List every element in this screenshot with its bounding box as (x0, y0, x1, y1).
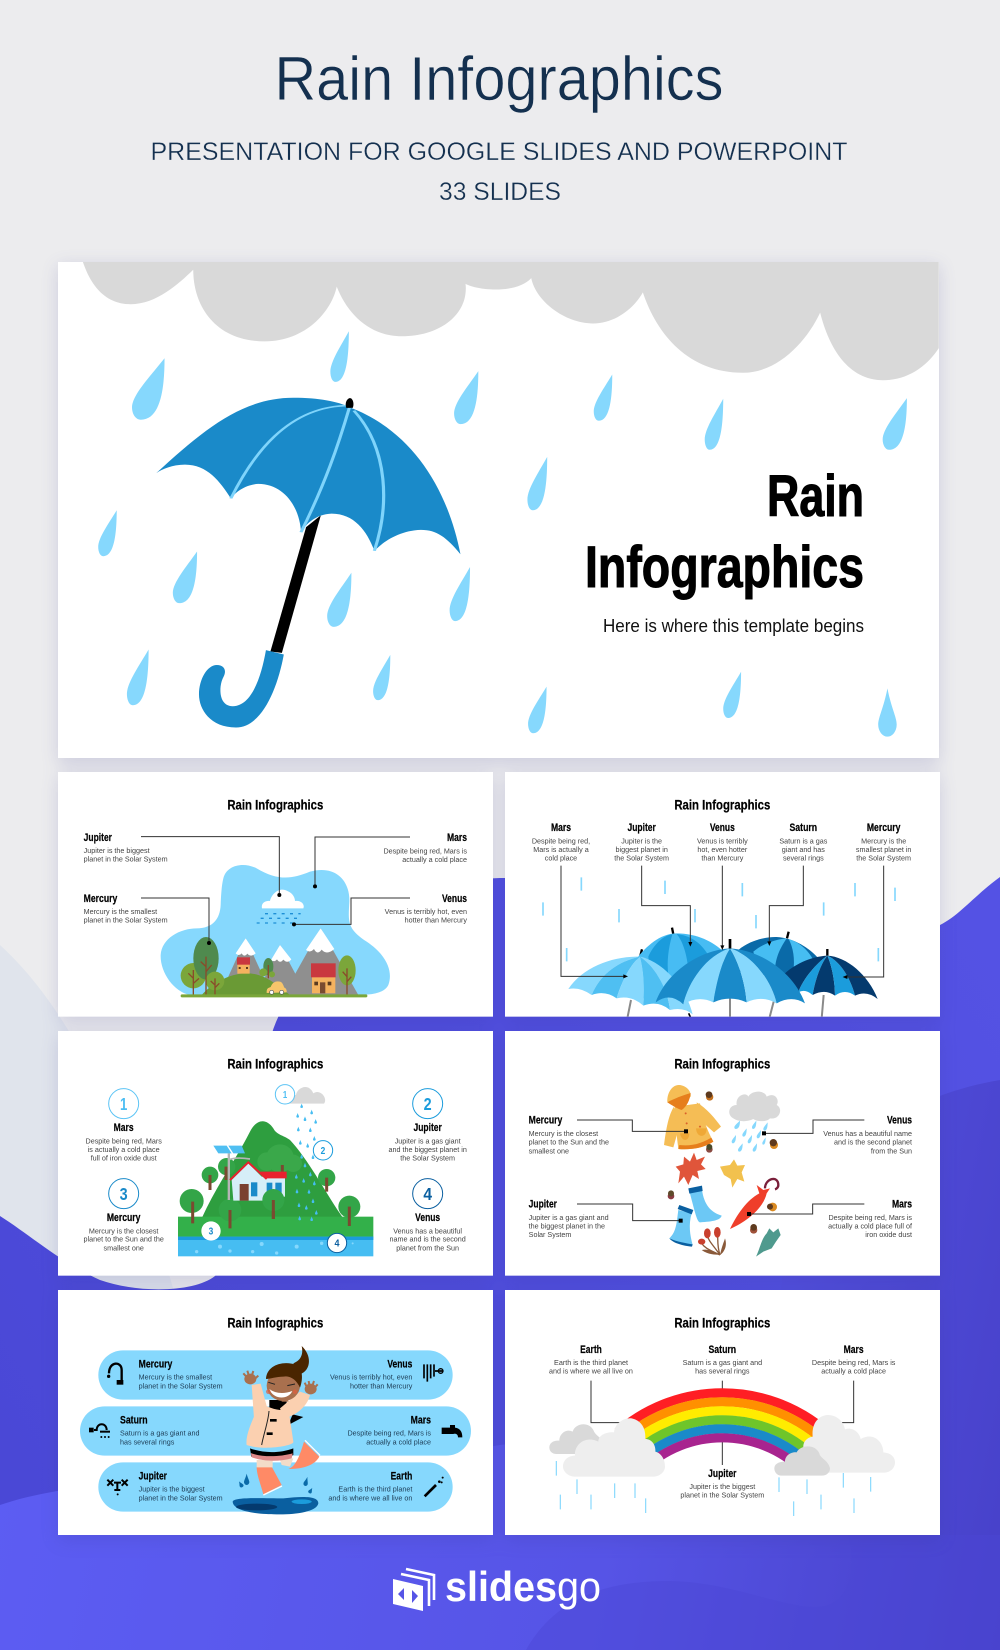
text: Earth: Earth (391, 1471, 413, 1483)
panel: rainbow slide (505, 1290, 940, 1535)
text: Venus: hotter than Mercury (405, 916, 467, 925)
text: Mars: Despite being red, Mars is (828, 1213, 912, 1222)
text: Mars: Despite being red, Mars is (347, 1429, 431, 1438)
text: Mercury: Mercury (867, 822, 901, 834)
umbrella group (568, 928, 878, 1018)
text: Saturn: giant and has (782, 845, 825, 854)
text: Saturn (683, 1344, 762, 1376)
cloud: right (803, 1415, 895, 1473)
rain streaks (543, 877, 895, 961)
text: Venus: Venus (442, 893, 467, 905)
text: Mars: Despite being red, Mars is (812, 1358, 896, 1367)
text: Jupiter: Jupiter (413, 1122, 442, 1134)
text: Venus (330, 1359, 413, 1390)
connector dots (207, 884, 317, 945)
icon: shower (89, 1424, 110, 1438)
text: Venus: than Mercury (701, 854, 744, 863)
text: Venus: Venus has a beautiful (393, 1226, 462, 1235)
text: Saturn: Saturn (708, 1344, 736, 1356)
main title: Rain Infographics (274, 45, 724, 114)
text: Mars (812, 1344, 896, 1376)
heading: Rain Infographics (674, 1314, 771, 1330)
marker 3 (201, 1221, 221, 1241)
icon: red leaf (676, 1153, 706, 1185)
text: Venus: Venus is terribly (697, 836, 748, 845)
text: Mars: Despite being red, Mars is (383, 846, 467, 855)
connector lines (591, 1381, 854, 1465)
text: Mars: Mars (892, 1199, 912, 1211)
text: Venus: and is the second planet (834, 1138, 912, 1147)
panel: hero slide (58, 262, 939, 758)
icon: boots (669, 1186, 722, 1247)
text: Mars (347, 1415, 431, 1446)
marker 2: 2 (321, 1146, 326, 1157)
marker 1: 1 (283, 1090, 288, 1101)
text: Saturn: several rings (783, 854, 824, 863)
text: Saturn (779, 822, 828, 863)
marker 4: 4 (334, 1239, 340, 1250)
marker 2 (313, 1141, 333, 1160)
text: Jupiter: planet in the Solar System (84, 855, 168, 864)
text: Mars (383, 832, 467, 864)
text: Jupiter: Jupiter is a gas giant (395, 1136, 461, 1145)
blue pills (80, 1350, 471, 1512)
heading: Rain Infographics (227, 1314, 324, 1330)
text: Venus: Venus is terribly hot, even (330, 1373, 412, 1382)
text: Jupiter: Jupiter is a gas giant and (529, 1213, 609, 1222)
text: Jupiter: Jupiter (84, 832, 113, 844)
text: Mars: Mars (114, 1122, 134, 1134)
text: Mars: Mars (411, 1415, 431, 1427)
text: Saturn: Saturn is a gas (779, 836, 828, 845)
text: Venus (389, 1212, 466, 1252)
text: Saturn (120, 1415, 200, 1446)
text: Venus: hot, even hotter (697, 845, 748, 854)
text: Mercury: planet to the Sun and the (84, 1235, 164, 1244)
text: Jupiter (139, 1471, 223, 1502)
icon: yellow leaf (720, 1159, 745, 1188)
text: Mars: Mars (447, 832, 467, 844)
text: Mercury (856, 822, 911, 863)
text: Jupiter: biggest planet in (615, 845, 668, 854)
text: Mars: Mars is actually a (533, 845, 589, 854)
text: Jupiter: the Solar System (400, 1153, 455, 1162)
icon: hose (424, 1364, 443, 1382)
text: Jupiter: Jupiter (139, 1471, 168, 1483)
text: Mercury: Mercury is the closest (89, 1226, 158, 1235)
text: Earth: Earth (580, 1344, 602, 1356)
cloud: front right (774, 1446, 830, 1476)
text: Venus: Venus has a beautiful name (823, 1129, 912, 1138)
badge 4 (413, 1179, 443, 1209)
badge 2: 2 (424, 1094, 432, 1114)
text: Mars: full of iron oxide dust (91, 1153, 157, 1162)
rain streaks (556, 1461, 871, 1516)
text: Saturn: has several rings (120, 1437, 175, 1446)
text: Mercury (84, 1212, 164, 1252)
subtitle: PRESENTATION FOR GOOGLE SLIDES AND POWERPOINT (150, 138, 848, 166)
text: Jupiter: the biggest planet in the (529, 1222, 605, 1231)
hero title: Infographics (585, 535, 864, 600)
text: Mars: Mars (844, 1344, 864, 1356)
text: Mars: iron oxide dust (865, 1230, 912, 1239)
text: Venus: Venus (387, 1359, 412, 1371)
heading: Rain Infographics (674, 1055, 771, 1071)
marker 4 (327, 1233, 347, 1253)
text: Jupiter: planet in the Solar System (680, 1491, 764, 1500)
text: Mercury: Mercury (84, 893, 118, 905)
text: Venus: planet from the Sun (396, 1243, 459, 1252)
marker 3: 3 (209, 1227, 214, 1238)
text: Mars: Mars (551, 822, 571, 834)
text: Mercury: planet in the Solar System (139, 1381, 223, 1390)
text: Mercury: Mercury (107, 1212, 141, 1224)
hands (243, 1371, 318, 1394)
panel shadows (58, 266, 940, 1541)
text: Mercury: planet to the Sun and the (529, 1138, 609, 1147)
icon: acorns (668, 1091, 778, 1234)
text: Mercury: Mercury is the closest (529, 1129, 598, 1138)
panel: landscape slide (58, 772, 493, 1017)
text: Mercury: smallest planet in (856, 845, 911, 854)
panel: umbrellas slide (505, 772, 940, 1018)
illustration: girl jumping in puddle (233, 1346, 320, 1514)
icon: stacked slides (393, 1569, 434, 1611)
text: Mars (86, 1122, 162, 1162)
text: Jupiter: the Solar System (614, 854, 669, 863)
landscape illustration (161, 865, 390, 997)
text: Saturn: Saturn is a gas giant and (683, 1358, 762, 1367)
text: Venus: hotter than Mercury (350, 1381, 413, 1390)
icon: faucet (107, 1364, 123, 1385)
text: Mars: Despite being red, (532, 836, 590, 845)
text: Venus: Venus (415, 1212, 440, 1224)
connector squares (679, 1129, 766, 1223)
text: Jupiter: Jupiter (529, 1199, 558, 1211)
cloud: front left (563, 1418, 665, 1477)
panel: autumn items slide (505, 1031, 940, 1276)
heading: Rain Infographics (674, 796, 771, 812)
coat (246, 1384, 310, 1448)
icon: nozzle (425, 1477, 444, 1496)
text: Earth: Earth is the third planet (554, 1358, 628, 1367)
text: Mercury: Mercury is the smallest (139, 1373, 212, 1382)
text: Mars: actually a cold place (402, 855, 467, 864)
badge 2 (413, 1089, 443, 1119)
text: Jupiter: Jupiter is the biggest (84, 846, 150, 855)
text: Mercury: Mercury is the smallest (84, 907, 157, 916)
badge 1 (109, 1089, 139, 1119)
text: Mars: cold place (545, 854, 577, 863)
storm cloud (83, 262, 939, 380)
panel: puddle girl slide (58, 1290, 493, 1535)
text: Mars: actually a cold place (821, 1367, 886, 1376)
text: Jupiter (614, 822, 669, 863)
text: Earth: and is where we all live on (328, 1493, 412, 1502)
icon: tap (442, 1425, 462, 1437)
badge 4: 4 (423, 1184, 432, 1204)
text: Mars (532, 822, 590, 863)
text: Mars: is actually a cold place (88, 1145, 160, 1154)
text: Jupiter: Jupiter (708, 1468, 737, 1480)
text: Mercury: Mercury (139, 1359, 173, 1371)
icon: sprinkler (107, 1480, 128, 1495)
text: Venus: Venus is terribly hot, even (385, 907, 467, 916)
badge 3: 3 (120, 1184, 128, 1204)
text: Mercury (529, 1115, 609, 1155)
text: Jupiter: Jupiter (627, 822, 656, 834)
text: Venus: Venus (887, 1115, 912, 1127)
logo: slidesgo (393, 1563, 601, 1611)
text: Saturn: has several rings (695, 1367, 750, 1376)
skirt stripes (250, 1448, 293, 1461)
text: Jupiter: Jupiter is the biggest (139, 1485, 205, 1494)
text: Mercury: planet in the Solar System (84, 916, 168, 925)
umbrella (156, 398, 460, 728)
text: Mars (828, 1199, 912, 1239)
heading: Rain Infographics (227, 1055, 324, 1071)
text: Jupiter (680, 1468, 764, 1500)
raindrops (98, 331, 907, 737)
text: Mercury: Mercury is the (861, 836, 906, 845)
text: Earth: Earth is the third planet (338, 1485, 412, 1494)
rainbow (614, 1388, 818, 1462)
text: Mercury: the Solar System (856, 854, 911, 863)
text: Saturn: Saturn is a gas giant and (120, 1429, 200, 1438)
text: Mercury (84, 893, 168, 925)
hero subtitle: Here is where this template begins (603, 616, 864, 636)
text: Jupiter (529, 1199, 609, 1239)
text: Jupiter: and the biggest planet in (388, 1145, 467, 1154)
icon: closed umbrella (730, 1179, 778, 1229)
connector arrows (561, 866, 884, 979)
legs and boots (257, 1440, 320, 1495)
connector lines (577, 1120, 864, 1221)
wordmark: slidesgo (445, 1563, 601, 1610)
text: Venus: from the Sun (871, 1146, 912, 1155)
text: Jupiter: Jupiter is the biggest (689, 1482, 755, 1491)
text: Mars: actually a cold place (366, 1437, 431, 1446)
text: Earth (549, 1344, 633, 1376)
icon: berries (698, 1227, 726, 1255)
text: Saturn: Saturn (789, 822, 817, 834)
cloud: back left (549, 1424, 603, 1454)
slide count: 33 SLIDES (439, 178, 561, 206)
heading: Rain Infographics (227, 796, 324, 812)
hero artwork (83, 262, 939, 737)
text: Mercury: Mercury (529, 1115, 563, 1127)
text: Jupiter (388, 1122, 467, 1162)
icon: green leaf (756, 1228, 781, 1257)
text: Venus: name and is the second (389, 1235, 466, 1244)
text: Mars: Despite being red, Mars (86, 1136, 162, 1145)
text: Mars: actually a cold place full of (828, 1222, 912, 1231)
text: Venus (697, 822, 748, 863)
text: Venus: Venus (710, 822, 735, 834)
badge 1: 1 (120, 1094, 128, 1114)
marker 1 (275, 1085, 295, 1104)
text: Earth (328, 1471, 413, 1502)
text: Saturn: Saturn (120, 1415, 148, 1427)
text: Mercury: smallest one (529, 1146, 569, 1155)
text: Venus (823, 1115, 912, 1155)
text: Jupiter: planet in the Solar System (139, 1493, 223, 1502)
text: Earth: and is where we all live on (549, 1367, 633, 1376)
panel: water cycle slide (58, 1031, 493, 1276)
text: Mercury: smallest one (103, 1243, 144, 1252)
text: Jupiter: Jupiter is the (621, 836, 662, 845)
mountain house illustration (178, 1087, 373, 1256)
head and hair (266, 1346, 309, 1401)
hero title (585, 464, 864, 600)
text: Mercury (139, 1359, 223, 1390)
icon: raincoat (664, 1085, 721, 1149)
badge 3 (109, 1179, 139, 1209)
text: Jupiter (84, 832, 168, 864)
text: Jupiter: Solar System (529, 1230, 571, 1239)
icon: rain cloud (729, 1092, 780, 1152)
hero title: Rain (767, 464, 864, 529)
connector lines (141, 837, 410, 943)
text: Venus (385, 893, 467, 925)
